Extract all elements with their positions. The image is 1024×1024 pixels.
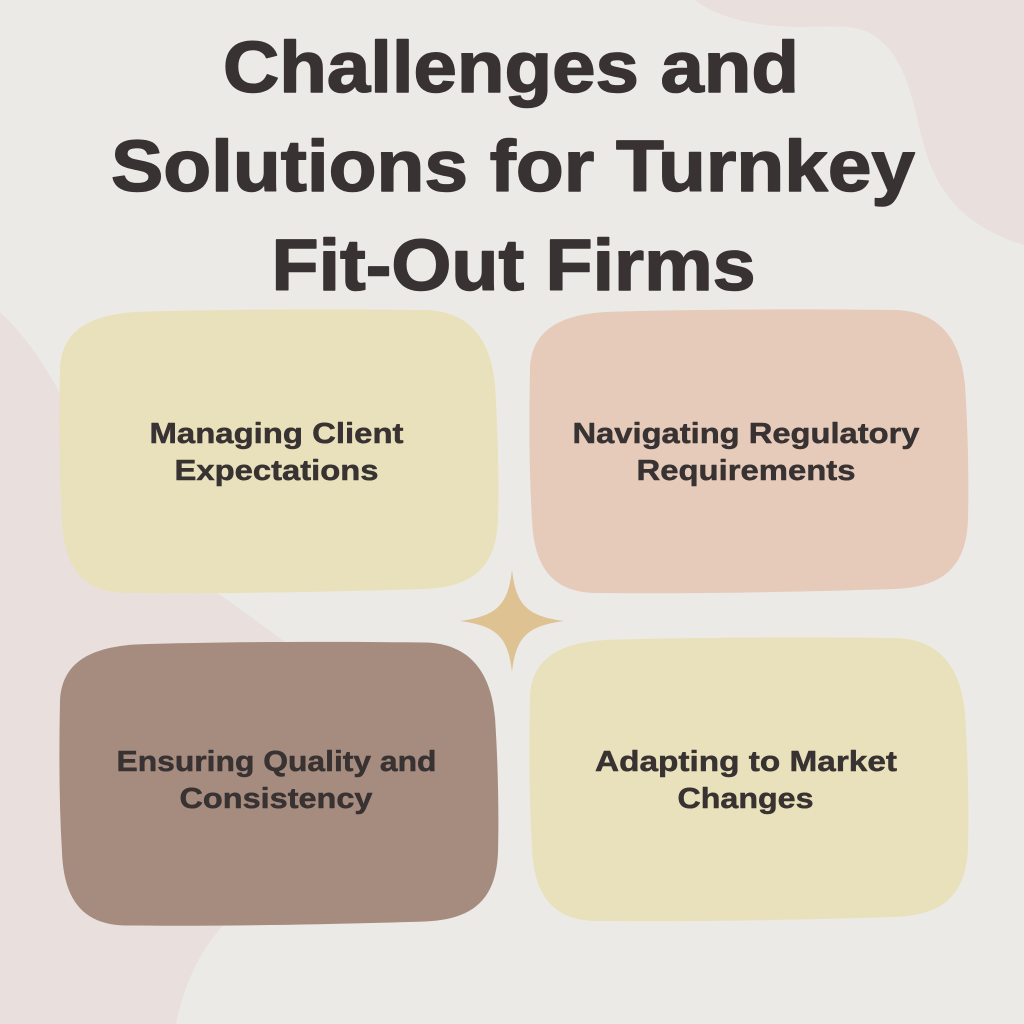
panel: navigating regulatory requirements: Requirements (636, 455, 856, 487)
title: Fit-Out Firms (272, 226, 756, 306)
panel: navigating regulatory requirements: Navigating Regulatory (572, 418, 920, 450)
panel: ensuring quality and consistency: Ensuring Quality and (116, 746, 436, 778)
title (111, 28, 915, 306)
panel: navigating regulatory requirements (529, 309, 968, 593)
background blob: top right (695, 0, 1024, 245)
panel: adapting to market changes: Changes (678, 783, 814, 815)
panel: adapting to market changes (529, 637, 968, 921)
title: Solutions for Turnkey (111, 127, 915, 207)
icon: four-point star (460, 570, 564, 672)
panel: ensuring quality and consistency (59, 642, 498, 926)
panel: adapting to market changes: Adapting to Market (595, 746, 898, 778)
panel: managing client expectations: Managing Client (150, 418, 404, 450)
background blob: bottom left (0, 312, 300, 1024)
panel: ensuring quality and consistency: Consistency (180, 783, 373, 815)
panel: managing client expectations: Expectations (174, 455, 378, 487)
panel: managing client expectations (59, 309, 498, 593)
title: Challenges and (223, 28, 799, 108)
